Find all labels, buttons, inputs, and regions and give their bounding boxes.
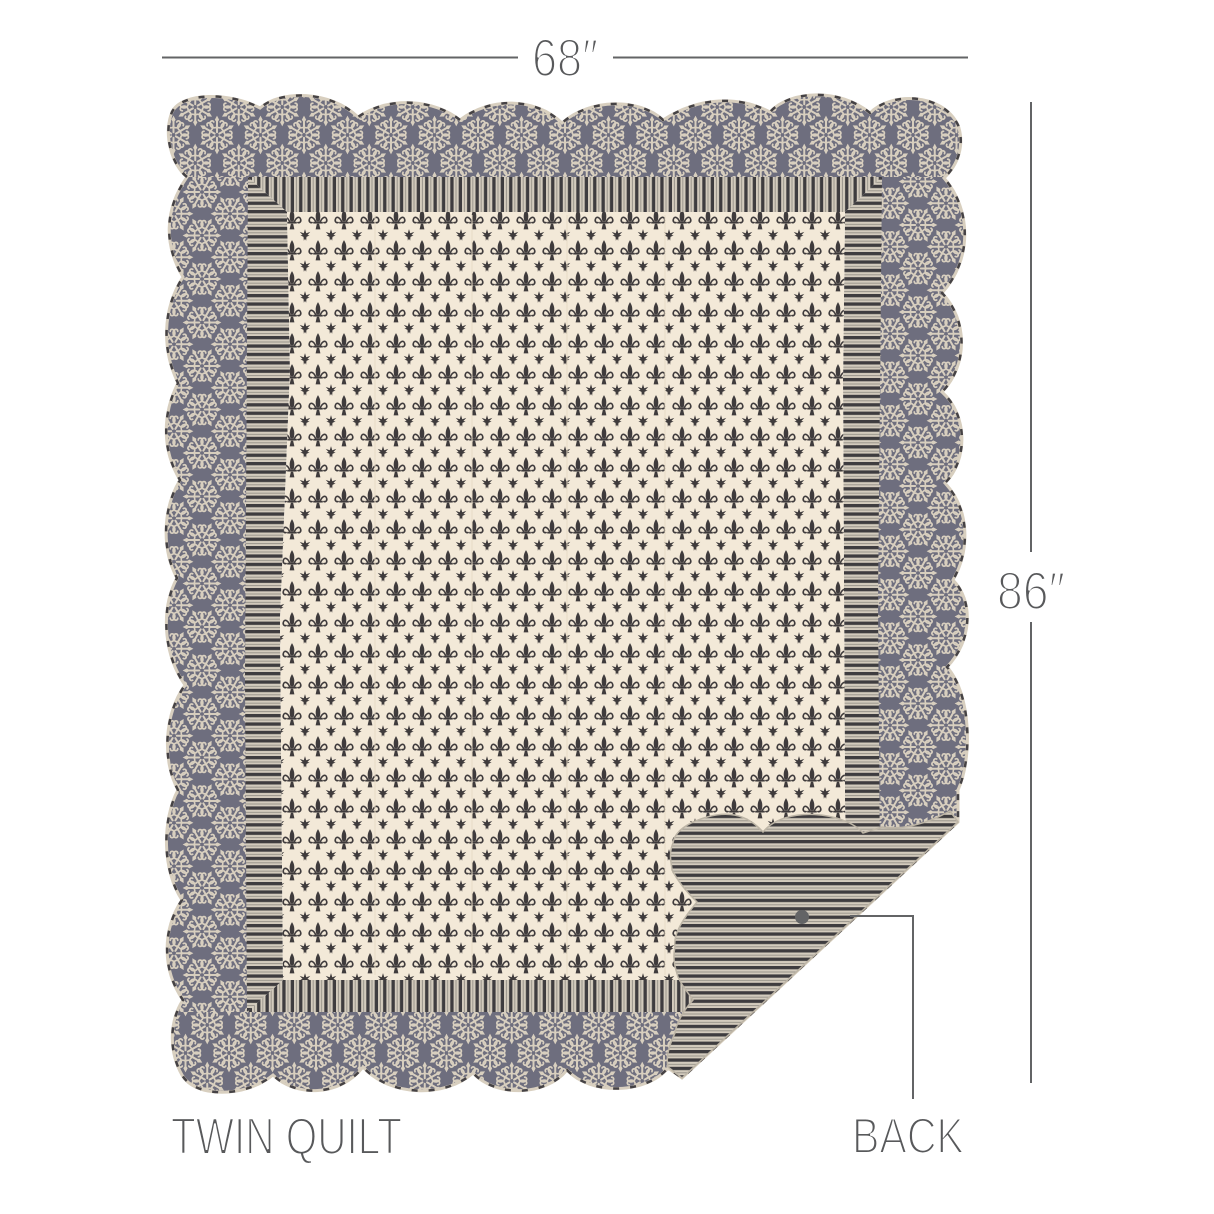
panel: ticking stripe frame <box>245 177 882 1012</box>
height dimension line <box>1030 102 1032 1083</box>
panel: scalloped grey medallion border <box>150 85 980 1107</box>
width label: 68″ <box>532 29 598 88</box>
height label: 86″ <box>997 562 1065 621</box>
quilt illustration <box>150 85 980 1107</box>
front label: TWIN QUILT <box>171 1108 402 1166</box>
border piping <box>166 95 967 1092</box>
width dimension line <box>162 56 968 58</box>
back label: BACK <box>852 1108 964 1164</box>
panel: folded corner showing striped back <box>667 811 958 1078</box>
back callout leader with dot <box>795 910 913 1099</box>
panel: cream fleur-de-lis centre <box>280 212 848 980</box>
